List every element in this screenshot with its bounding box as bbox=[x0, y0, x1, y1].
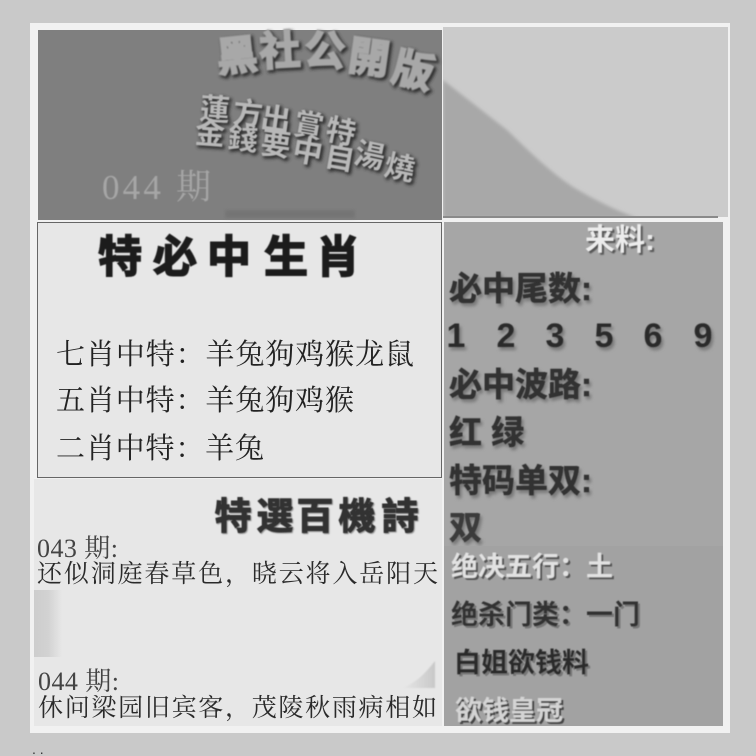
subtitle: two slanted lines: 湯 bbox=[351, 137, 388, 176]
row: five elements: 绝决五行：土 bbox=[451, 552, 613, 582]
heading: zodiac: 生 bbox=[264, 233, 308, 282]
poem heading: 選 bbox=[258, 497, 294, 538]
row: bai jie: 白姐欲钱料 bbox=[454, 648, 589, 678]
heading: arched title: 黑 bbox=[214, 31, 260, 81]
heading: arched title: 版 bbox=[390, 46, 440, 100]
heading: arched title: 社 bbox=[258, 27, 302, 75]
subtitle: two slanted lines: 燒 bbox=[381, 149, 418, 188]
heading: arched title: 公 bbox=[303, 27, 347, 75]
tail numbers: 9 bbox=[696, 320, 714, 358]
data rows: 必中尾数: bbox=[449, 270, 592, 307]
heading: zodiac bbox=[98, 233, 360, 282]
heading: materials: 来料: bbox=[585, 224, 655, 257]
poem heading: 機 bbox=[340, 497, 376, 538]
subtitle: two slanted lines: 中 bbox=[290, 134, 325, 171]
tail numbers: 1 bbox=[449, 320, 467, 358]
poem 044: 044 期: bbox=[38, 667, 119, 696]
row: crown: 欲钱皇冠 bbox=[457, 698, 565, 728]
panel: special zodiac bbox=[38, 222, 442, 478]
subtitle: two slanted lines: 出 bbox=[261, 104, 295, 141]
heading: zodiac: 中 bbox=[207, 233, 251, 282]
even label: 双 bbox=[449, 509, 482, 546]
panel: top-left header bbox=[38, 27, 442, 220]
subtitle: two slanted lines: 賞 bbox=[293, 110, 328, 147]
subtitle: two slanted lines: 中 bbox=[292, 136, 327, 173]
heading: arched title: 社 bbox=[260, 29, 304, 77]
smudge left bbox=[34, 590, 62, 657]
row: doors: 绝杀门类：一门 bbox=[453, 602, 642, 632]
subtitle: two slanted lines: 要 bbox=[259, 127, 293, 164]
subtitle: two slanted lines: 出 bbox=[259, 102, 293, 139]
heading: materials: 来料: bbox=[587, 226, 657, 259]
poem heading: 詩 bbox=[382, 497, 420, 538]
tail numbers bbox=[447, 317, 714, 358]
poem heading: 特 bbox=[216, 497, 252, 538]
row: five elements: 绝决五行：土 bbox=[453, 554, 615, 584]
tail numbers: 6 bbox=[644, 317, 662, 355]
subtitle: two slanted lines: 自 bbox=[324, 142, 359, 179]
panel: right data upper bbox=[444, 222, 723, 549]
subtitle: two slanted lines: 方 bbox=[231, 97, 264, 132]
heading: arched title bbox=[214, 27, 440, 100]
subtitle: two slanted lines bbox=[194, 93, 420, 190]
subtitle: two slanted lines: 方 bbox=[233, 99, 266, 134]
subtitle: two slanted lines: 燒 bbox=[383, 151, 420, 190]
data rows: 必中波路: bbox=[451, 369, 594, 406]
subtitle: two slanted lines: 錢 bbox=[228, 124, 261, 159]
subtitle: two slanted lines: 錢 bbox=[226, 122, 259, 157]
subtitle: two slanted lines: 賞 bbox=[291, 108, 326, 145]
tail numbers: 2 bbox=[499, 320, 517, 358]
heading: arched title: 黑 bbox=[216, 33, 262, 83]
data rows: 特码单双: bbox=[451, 465, 594, 502]
tail numbers: 3 bbox=[546, 317, 564, 355]
data rows: 双 bbox=[451, 512, 484, 549]
panel: poem: 还似洞庭春草色，晓云将入岳阳天 bbox=[37, 560, 438, 588]
tail numbers: 5 bbox=[595, 317, 613, 355]
heading: arched title: 公 bbox=[305, 29, 349, 77]
subtitle: two slanted lines: 要 bbox=[261, 129, 295, 166]
zodiac line 2: 五肖中特：羊兔狗鸡猴 bbox=[56, 384, 354, 417]
data rows bbox=[447, 270, 714, 549]
poem heading: 詩 bbox=[382, 496, 418, 537]
subtitle: two slanted lines: 蓮 bbox=[199, 93, 231, 128]
tail numbers: 3 bbox=[548, 320, 566, 358]
subtitle: two slanted lines: 金 bbox=[194, 117, 226, 152]
panel: right data lower bbox=[444, 546, 723, 728]
data rows: 必中尾数: bbox=[451, 273, 594, 310]
poem heading: 選 bbox=[256, 496, 294, 537]
tail numbers: 6 bbox=[646, 320, 664, 358]
smudge right bbox=[402, 661, 435, 688]
data rows: 红 绿 bbox=[451, 417, 526, 454]
subtitle: two slanted lines: 自 bbox=[322, 140, 357, 177]
tail numbers: 1 bbox=[447, 317, 465, 355]
row: doors: 绝杀门类：一门 bbox=[451, 600, 640, 630]
poem heading: 機 bbox=[338, 496, 376, 537]
tail numbers: 2 bbox=[497, 317, 515, 355]
subtitle: two slanted lines: 蓮 bbox=[201, 95, 233, 130]
data rows: 特码单双: bbox=[449, 462, 592, 499]
subtitle: two slanted lines: 湯 bbox=[353, 139, 390, 178]
panel: top-right blank with swoosh bbox=[443, 27, 728, 218]
row: bai jie: 白姐欲钱料 bbox=[456, 650, 591, 680]
poem heading bbox=[214, 496, 420, 538]
row: crown: 欲钱皇冠 bbox=[455, 696, 563, 726]
heading: arched title: 開 bbox=[345, 32, 393, 84]
subtitle: two slanted lines: 金 bbox=[196, 119, 228, 154]
issue number: 044 期 bbox=[102, 168, 211, 207]
poem 043: 043 期: bbox=[37, 534, 118, 563]
poem heading: 百 bbox=[296, 496, 334, 537]
subtitle: two slanted lines: 特 bbox=[322, 113, 359, 152]
tail numbers: 9 bbox=[694, 317, 712, 355]
zodiac line 1: 七肖中特：羊兔狗鸡猴龙鼠 bbox=[56, 338, 414, 371]
panel: poem bbox=[34, 479, 442, 726]
panel: poem: 休问梁园旧宾客，茂陵秋雨病相如 bbox=[38, 694, 437, 722]
zodiac line 3: 二肖中特：羊兔 bbox=[56, 432, 264, 465]
tail numbers: 5 bbox=[597, 320, 615, 358]
poem heading: 百 bbox=[298, 497, 334, 538]
poem heading: 特 bbox=[214, 496, 252, 537]
subtitle: two slanted lines: 特 bbox=[324, 115, 361, 154]
data rows: 红 绿 bbox=[449, 414, 524, 451]
data rows: 必中波路: bbox=[449, 366, 592, 403]
heading: arched title: 版 bbox=[388, 44, 438, 98]
heading: zodiac: 特 bbox=[98, 233, 142, 282]
heading: zodiac: 必 bbox=[153, 233, 197, 282]
heading: arched title: 開 bbox=[347, 34, 395, 86]
heading: zodiac: 肖 bbox=[316, 233, 360, 282]
